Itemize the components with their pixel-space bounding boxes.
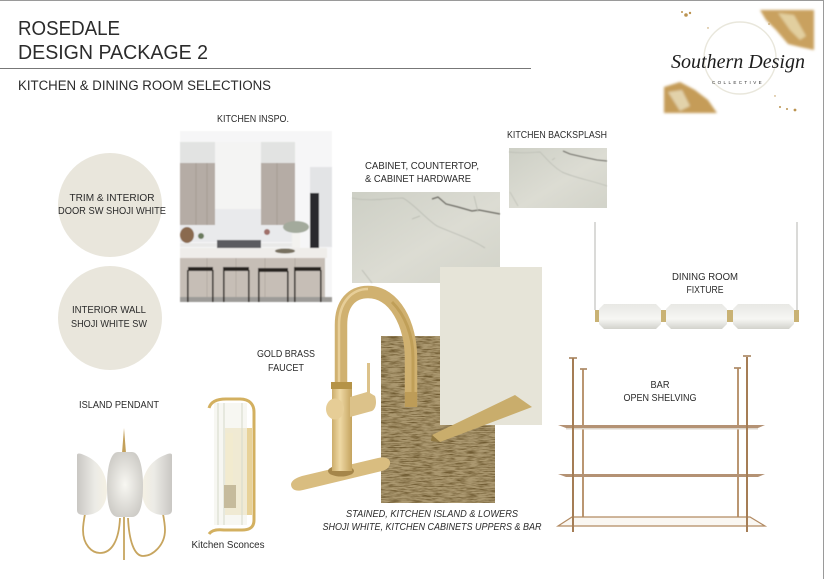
paint swatch: trim and interior door: TRIM & INTERIOR (70, 193, 154, 204)
paint swatch: interior wall: INTERIOR WALL (72, 305, 146, 316)
countertop marble swatch (352, 192, 500, 283)
logo: Southern Design (671, 51, 805, 73)
label: kitchen backsplash: KITCHEN BACKSPLASH (507, 130, 607, 141)
label: gold brass faucet: GOLD BRASS (257, 349, 315, 360)
kitchen inspiration photo (180, 131, 332, 302)
title (18, 18, 208, 64)
paint swatch: interior wall (58, 266, 162, 370)
caption: cabinet finishes (322, 509, 542, 533)
label: kitchen inspo: KITCHEN INSPO. (217, 114, 289, 125)
bar open shelving unit (558, 356, 765, 532)
label: bar open shelving: OPEN SHELVING (624, 393, 697, 404)
label: dining room fixture (672, 272, 738, 296)
cabinet pull hardware (431, 395, 532, 442)
caption: cabinet finishes: SHOJI WHITE, KITCHEN CABINETS UPPERS & BAR (322, 522, 542, 533)
label: kitchen sconces: Kitchen Sconces (192, 540, 264, 551)
gold brass faucet (291, 289, 417, 491)
paint swatch: interior wall: SHOJI WHITE SW (71, 319, 147, 330)
title: DESIGN PACKAGE 2 (18, 42, 208, 64)
label: gold brass faucet: FAUCET (268, 363, 304, 374)
label: cabinet, countertop and hardware: & CABINET HARDWARE (365, 174, 471, 185)
paint swatch: trim and interior door: DOOR SW SHOJI WHITE (58, 206, 166, 217)
logo (664, 10, 814, 113)
label: island pendant: ISLAND PENDANT (79, 400, 159, 411)
island pendant light (77, 428, 172, 560)
caption: cabinet finishes: STAINED, KITCHEN ISLAND & LOWERS (346, 509, 518, 520)
shoji white cabinet swatch (440, 267, 542, 425)
logo: COLLECTIVE (712, 80, 764, 85)
label: dining room fixture: DINING ROOM (672, 272, 738, 283)
title: ROSEDALE (18, 18, 120, 40)
label: cabinet, countertop and hardware: CABINET, COUNTERTOP, (365, 161, 479, 172)
backsplash marble swatch (509, 148, 607, 208)
label: gold brass faucet (257, 349, 315, 374)
label: bar open shelving: BAR (650, 380, 670, 391)
paint swatch: trim and interior door (58, 153, 166, 257)
dining room fixture (595, 222, 799, 329)
wood island swatch (381, 336, 495, 503)
subtitle: KITCHEN & DINING ROOM SELECTIONS (18, 78, 271, 93)
kitchen sconce (209, 399, 254, 534)
label: dining room fixture: FIXTURE (686, 285, 724, 296)
label: bar open shelving (624, 380, 697, 404)
label: cabinet, countertop and hardware (365, 161, 479, 185)
